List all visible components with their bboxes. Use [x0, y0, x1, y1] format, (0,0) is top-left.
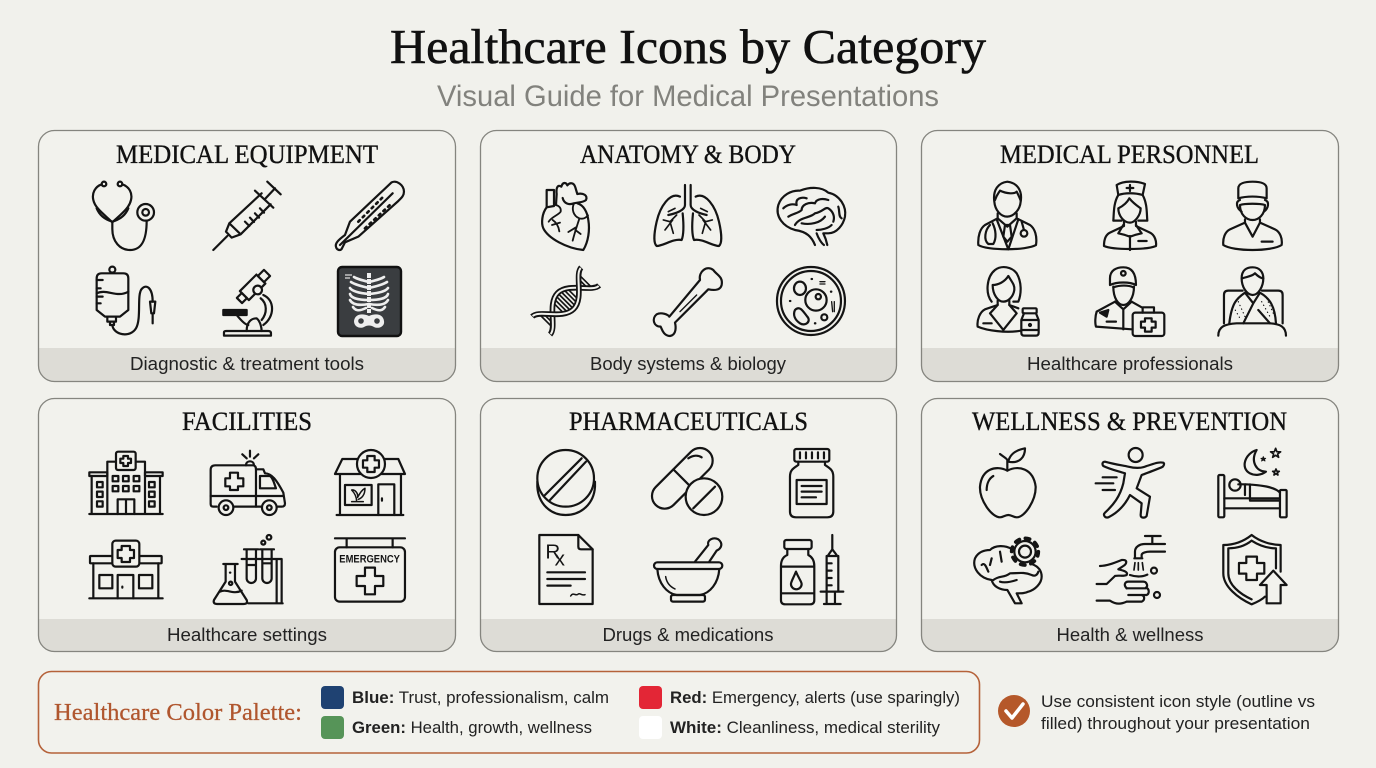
swatch: white — [639, 716, 941, 739]
swatch: white: White: Cleanliness, medical sterility — [670, 719, 941, 737]
caption: Healthcare professionals — [1027, 354, 1233, 374]
icon: brain with gear — [974, 538, 1042, 603]
panel: medical equipment — [38, 130, 456, 382]
caption: Body systems & biology — [590, 354, 786, 374]
icon: clinic — [89, 541, 163, 598]
tip callout — [998, 693, 1315, 733]
icon: brain — [778, 188, 845, 245]
swatch: red — [639, 686, 960, 709]
icon: emergency sign: EMERGENCY — [339, 554, 401, 566]
caption: Health & wellness — [1056, 625, 1204, 645]
swatch: blue — [321, 686, 609, 709]
panel: medical personnel — [922, 130, 1338, 382]
tip text: Use consistent icon style (outline vs — [1041, 693, 1315, 711]
icon: x-ray — [338, 267, 401, 336]
icon: runner — [1096, 448, 1164, 518]
icon: heart — [542, 183, 589, 250]
swatch: green — [321, 716, 592, 739]
icon: mortar and pestle — [654, 538, 722, 602]
swatch: red: Red: Emergency, alerts (use sparingly) — [670, 689, 960, 707]
icon: cell — [777, 267, 845, 335]
panel: pharmaceuticals — [480, 398, 896, 652]
icon: dna — [532, 268, 599, 334]
caption: Healthcare settings — [167, 625, 327, 645]
icon: prescription: x — [555, 547, 566, 570]
icon: prescription: R — [545, 540, 560, 563]
icon: nurse — [1104, 182, 1156, 250]
heading: PHARMACEUTICALS — [569, 407, 808, 436]
icon: female doctor with bottle — [977, 267, 1039, 336]
tip callout: filled) throughout your presentation — [1041, 715, 1310, 733]
heading: ANATOMY & BODY — [580, 140, 796, 169]
icon: bone — [654, 268, 722, 336]
swatch: blue: Blue: Trust, professionalism, calm — [352, 689, 609, 707]
icon: patient in bed — [1218, 267, 1286, 336]
heading: MEDICAL PERSONNEL — [1000, 140, 1259, 169]
caption: Drugs & medications — [602, 625, 774, 645]
icon: round tablet — [537, 450, 595, 515]
icon: stethoscope — [93, 182, 154, 250]
title: Healthcare Icons by Category — [390, 19, 987, 74]
icon: capsule and tablet — [647, 443, 722, 515]
subtitle: Visual Guide for Medical Presentations — [437, 80, 939, 113]
heading: MEDICAL EQUIPMENT — [116, 140, 378, 169]
panel: color palette legend — [38, 672, 980, 753]
icon: syringe — [213, 182, 281, 250]
icon: hand washing — [1097, 536, 1165, 604]
heading: WELLNESS & PREVENTION — [972, 407, 1287, 436]
icon: ambulance — [211, 451, 285, 515]
icon: lab flasks — [214, 535, 283, 604]
icon: sleep — [1218, 448, 1287, 517]
icon: iv bag — [97, 267, 155, 334]
icon: pill bottle — [790, 449, 833, 517]
icon: prescription — [539, 535, 593, 604]
icon: emergency sign — [335, 538, 405, 602]
panel: facilities — [38, 398, 456, 652]
heading: FACILITIES — [182, 407, 312, 436]
icon: check badge — [998, 695, 1030, 727]
swatch: green: Green: Health, growth, wellness — [352, 719, 592, 737]
panel: anatomy and body — [480, 130, 896, 382]
icon: microscope — [223, 268, 272, 336]
icon: doctor — [978, 182, 1036, 249]
icon: apple — [980, 448, 1036, 517]
icon: vial and syringe — [781, 535, 843, 604]
icon: hospital — [89, 452, 163, 514]
icon: surgeon — [1223, 182, 1282, 250]
icon: lungs — [654, 185, 721, 246]
legend title: Healthcare Color Palette: — [54, 700, 302, 726]
icon: shield with plus — [1223, 535, 1287, 604]
icon: clinic store — [335, 450, 405, 515]
panel: wellness and prevention — [922, 398, 1338, 652]
caption: Diagnostic & treatment tools — [130, 354, 364, 374]
icon: thermometer — [336, 182, 404, 250]
icon: paramedic with kit — [1095, 267, 1164, 336]
